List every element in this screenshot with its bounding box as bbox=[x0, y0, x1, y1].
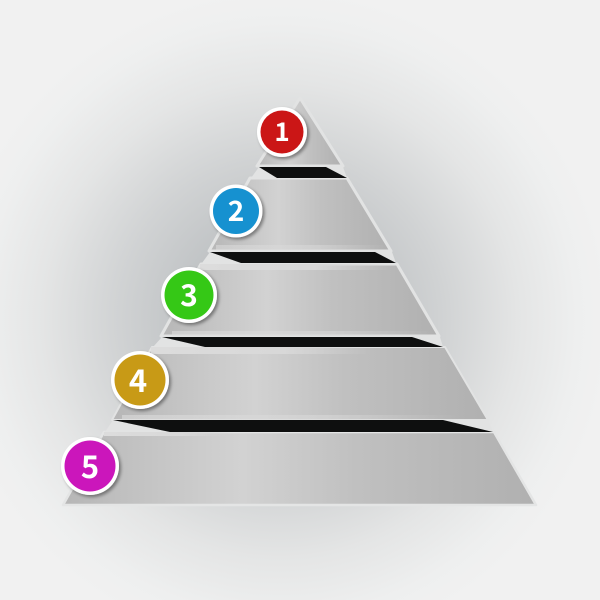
badge 1: 1 bbox=[274, 112, 290, 149]
badge 5: 5 bbox=[81, 442, 99, 487]
badge 3: 3 bbox=[180, 271, 198, 315]
badge 1 bbox=[257, 107, 307, 157]
badge 5 bbox=[61, 437, 119, 495]
tier 2 bbox=[209, 178, 391, 251]
tier 3 bbox=[161, 264, 439, 336]
tier 5 bbox=[63, 432, 536, 505]
tier 4 bbox=[112, 347, 488, 420]
badge 4: 4 bbox=[129, 356, 147, 401]
pyramid bbox=[63, 98, 536, 505]
light wedges beside the gaps bbox=[105, 167, 493, 432]
badge 2: 2 bbox=[228, 190, 244, 230]
badge 2 bbox=[210, 184, 262, 238]
badge 4 bbox=[111, 351, 169, 409]
badge 3 bbox=[161, 267, 217, 323]
tier 1 bbox=[257, 98, 343, 166]
black gaps between tiers bbox=[113, 167, 493, 432]
